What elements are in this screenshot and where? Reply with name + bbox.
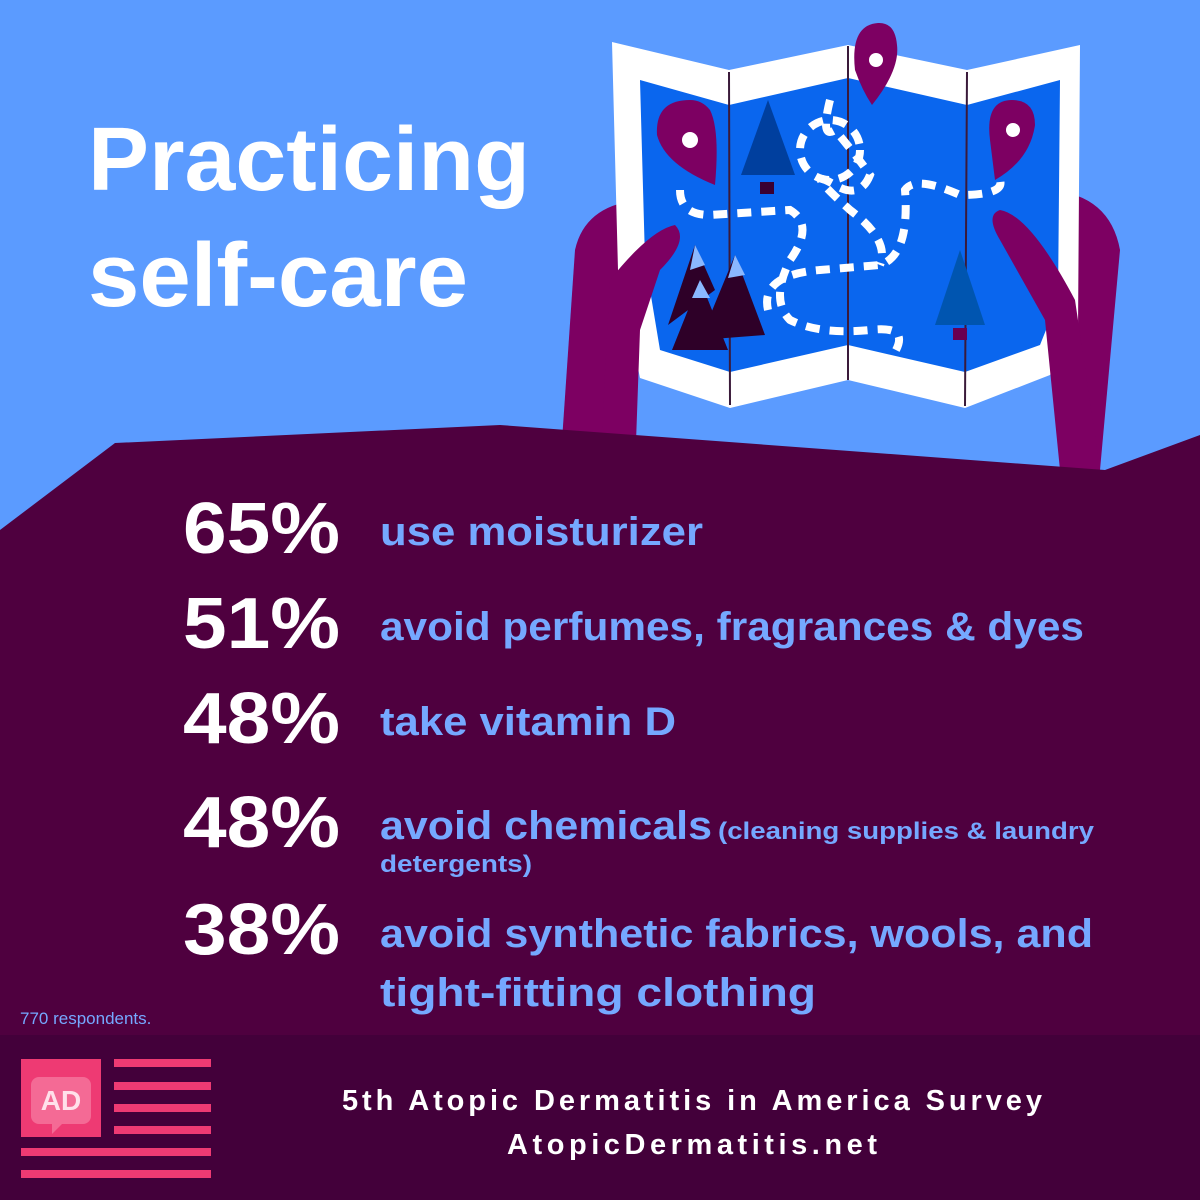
- stat 38%: [183, 890, 1093, 1015]
- footer text: [342, 1085, 1042, 1161]
- illustration: hands holding map: [560, 23, 1120, 470]
- thumbs: [600, 225, 680, 470]
- title: Practicing: [88, 110, 530, 210]
- stats list: [183, 489, 1095, 1015]
- pins: [657, 100, 717, 185]
- dashed path: [680, 100, 1000, 352]
- stat 51%: [183, 584, 1084, 664]
- stat 38%: avoid synthetic fabrics, wools, and: [380, 912, 1093, 956]
- stat 48% vitamin: take vitamin D: [380, 700, 676, 744]
- footer text: 5th Atopic Dermatitis in America Survey: [342, 1085, 1042, 1117]
- stat 48% chemicals: detergents): [380, 851, 532, 878]
- stat 48% vitamin: [183, 679, 676, 759]
- title: [88, 110, 530, 326]
- right hand: [1040, 190, 1120, 470]
- stat 65%: [183, 489, 703, 569]
- trees: [741, 100, 795, 175]
- title: self-care: [88, 226, 468, 326]
- stat 48% chemicals: (cleaning supplies & laundry: [718, 818, 1095, 845]
- folds: [729, 46, 967, 406]
- dark lower panel: [0, 425, 1200, 1200]
- respondents note: 770 respondents.: [20, 1009, 151, 1028]
- stat 38%: tight-fitting clothing: [380, 971, 816, 1015]
- logo: [21, 1059, 211, 1178]
- stat 48% chemicals: [183, 783, 1095, 878]
- stat 65%: use moisturizer: [380, 510, 703, 554]
- stat 48% chemicals: avoid chemicals: [380, 804, 712, 848]
- stat 48% chemicals: 48%: [183, 783, 340, 863]
- stat 38%: 38%: [183, 890, 340, 970]
- stat 51%: 51%: [183, 584, 340, 664]
- stat 65%: 65%: [183, 489, 340, 569]
- stat 51%: avoid perfumes, fragrances & dyes: [380, 605, 1084, 649]
- loop: [800, 120, 860, 180]
- footer text: AtopicDermatitis.net: [507, 1129, 877, 1161]
- mountains: [668, 245, 765, 350]
- left hand: [560, 200, 655, 470]
- footer band: [0, 1035, 1200, 1200]
- stat 48% vitamin: 48%: [183, 679, 340, 759]
- map white: [612, 42, 1080, 408]
- map blue: [640, 78, 1060, 372]
- logo: AD: [41, 1085, 81, 1116]
